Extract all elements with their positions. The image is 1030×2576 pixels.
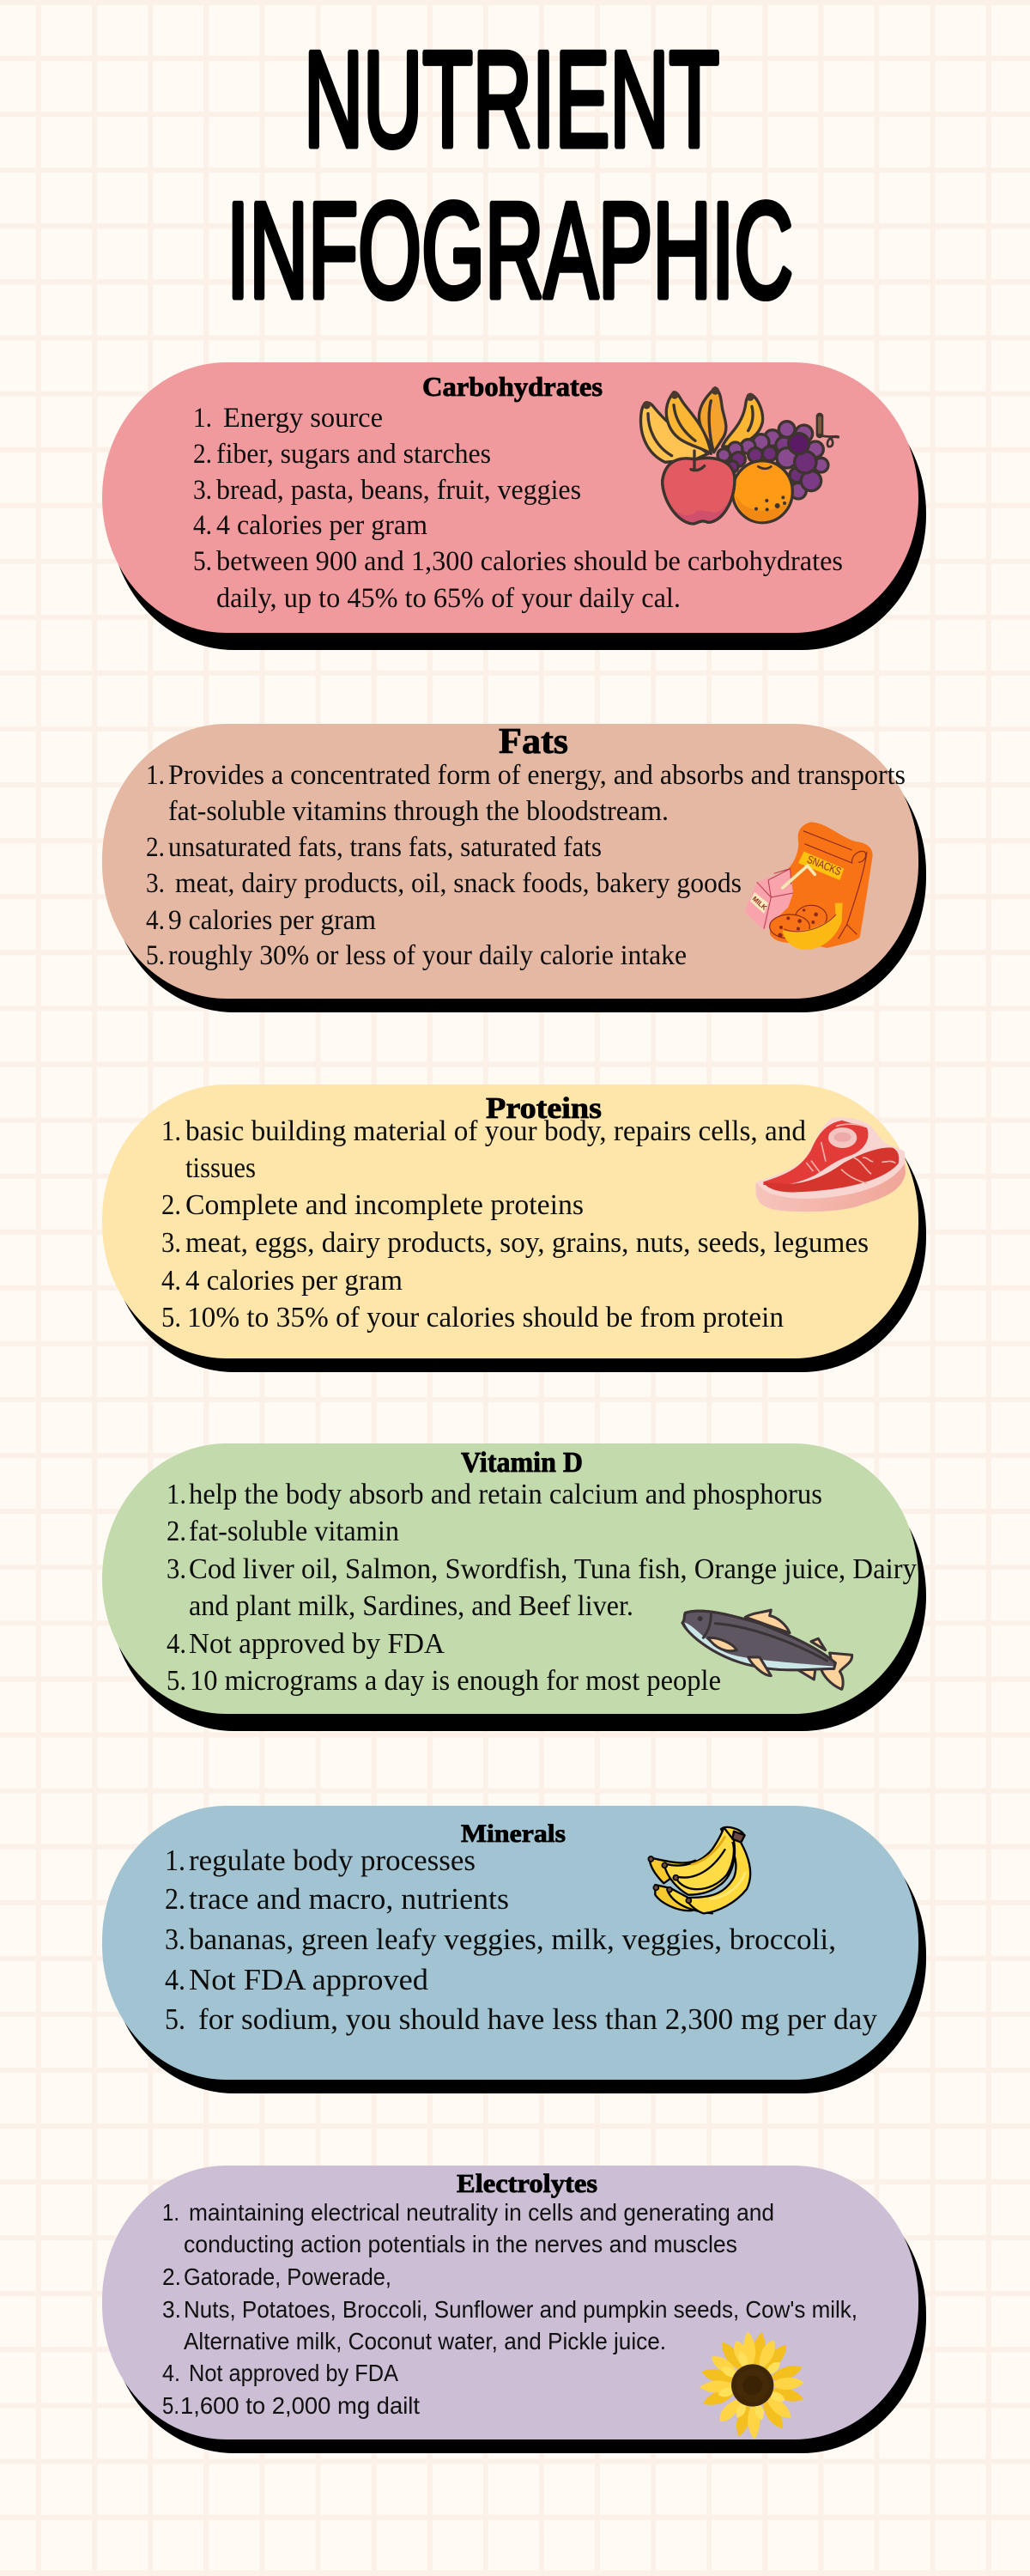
icon: snacks bag, milk and banana: MILK: [751, 895, 768, 912]
list: carbohydrates facts: 4.: [193, 510, 212, 541]
list: proteins facts: 2.: [161, 1189, 181, 1221]
list: carbohydrates facts: between 900 and 1,300 calories should be carbohydrates: [216, 546, 843, 577]
heading: electrolytes: Electrolytes: [457, 2168, 597, 2198]
icon: banana bunch: [648, 1827, 750, 1913]
list: electrolytes facts: Alternative milk, Coconut water, and Pickle juice.: [184, 2328, 666, 2354]
list: carbohydrates facts: 3.: [193, 475, 212, 506]
list: vitamin D facts: 4.: [167, 1628, 186, 1660]
list: fats facts: 3.: [146, 868, 165, 899]
list: vitamin D facts: Not approved by FDA: [189, 1628, 445, 1660]
list: electrolytes facts: [162, 2199, 857, 2419]
list: electrolytes facts: Not approved by FDA: [189, 2360, 398, 2386]
list: minerals facts: 2.: [165, 1882, 185, 1916]
list: vitamin D facts: 10 micrograms a day is enough for most people: [190, 1665, 721, 1697]
list: electrolytes facts: 4.: [162, 2360, 180, 2386]
list: electrolytes facts: Nuts, Potatoes, Broccoli, Sunflower and pumpkin seeds, Cow's milk,: [184, 2296, 857, 2323]
list: minerals facts: regulate body processes: [189, 1844, 476, 1877]
list: proteins facts: Complete and incomplete proteins: [185, 1189, 584, 1221]
list: vitamin D facts: 3.: [167, 1553, 186, 1585]
icon: snacks bag, milk and banana: SNACKS: [805, 854, 843, 878]
list: proteins facts: 3.: [161, 1227, 181, 1259]
panel: minerals: [102, 1806, 926, 2093]
list: electrolytes facts: conducting action potentials in the nerves and muscles: [184, 2231, 737, 2257]
list: carbohydrates facts: daily, up to 45% to 65% of your daily cal.: [216, 583, 681, 614]
list: proteins facts: 4 calories per gram: [185, 1265, 403, 1297]
list: minerals facts: 4.: [165, 1963, 185, 1996]
list: carbohydrates facts: 1.: [193, 403, 212, 434]
list: carbohydrates facts: Energy source: [223, 403, 383, 434]
list: electrolytes facts: Gatorade, Powerade,: [184, 2263, 391, 2290]
list: minerals facts: for sodium, you should have less than 2,300 mg per day: [198, 2002, 877, 2036]
list: minerals facts: 3.: [165, 1923, 185, 1956]
list: proteins facts: 1.: [161, 1115, 181, 1147]
icon: steak: [756, 1117, 906, 1212]
list: vitamin D facts: help the body absorb and retain calcium and phosphorus: [189, 1479, 822, 1510]
list: electrolytes facts: 1.: [162, 2199, 179, 2226]
list: carbohydrates facts: [193, 403, 843, 614]
list: vitamin D facts: 2.: [167, 1516, 186, 1547]
panel: carbohydrates: [102, 362, 926, 650]
list: proteins facts: 5.: [161, 1302, 181, 1334]
list: vitamin D facts: fat-soluble vitamin: [189, 1516, 399, 1547]
list: minerals facts: bananas, green leafy veggies, milk, veggies, broccoli,: [189, 1923, 836, 1956]
heading: proteins: Proteins: [486, 1091, 602, 1125]
heading: minerals: Minerals: [461, 1820, 566, 1848]
title: [227, 24, 793, 326]
list: fats facts: 5.: [146, 940, 165, 971]
list: fats facts: 2.: [146, 832, 165, 863]
list: vitamin D facts: [167, 1479, 917, 1697]
list: minerals facts: Not FDA approved: [189, 1963, 429, 1996]
list: minerals facts: trace and macro, nutrients: [189, 1882, 509, 1916]
list: fats facts: fat-soluble vitamins through the bloodstream.: [168, 796, 669, 827]
icon: fruit bundle: [641, 386, 839, 526]
list: proteins facts: meat, eggs, dairy products, soy, grains, nuts, seeds, legumes: [185, 1227, 869, 1259]
panel: vitamin D: [102, 1443, 926, 1731]
list: fats facts: Provides a concentrated form of energy, and absorbs and transports: [168, 760, 906, 791]
heading: carbohydrates: Carbohydrates: [422, 371, 603, 402]
list: electrolytes facts: 1,600 to 2,000 mg dailt: [180, 2392, 420, 2419]
list: minerals facts: [165, 1844, 877, 2036]
list: carbohydrates facts: 2.: [193, 439, 212, 470]
list: fats facts: 1.: [146, 760, 165, 791]
icon: sunflower: [700, 2330, 805, 2440]
list: fats facts: roughly 30% or less of your daily calorie intake: [168, 940, 687, 971]
list: vitamin D facts: 5.: [167, 1665, 186, 1697]
list: fats facts: 9 calories per gram: [168, 905, 376, 936]
list: carbohydrates facts: bread, pasta, beans, fruit, veggies: [216, 475, 581, 506]
list: fats facts: 4.: [146, 905, 165, 936]
list: proteins facts: 4.: [161, 1265, 181, 1297]
list: vitamin D facts: and plant milk, Sardines, and Beef liver.: [189, 1590, 633, 1622]
panel: fats: [102, 722, 926, 1012]
icon: snacks bag, milk and banana: [744, 822, 873, 950]
list: electrolytes facts: 2.: [162, 2263, 181, 2290]
list: carbohydrates facts: 4 calories per gram: [216, 510, 427, 541]
icon: fish: [682, 1610, 852, 1689]
list: fats facts: [146, 760, 906, 971]
list: electrolytes facts: 3.: [162, 2296, 181, 2323]
list: carbohydrates facts: fiber, sugars and starches: [216, 439, 491, 470]
heading: vitamin D: Vitamin D: [461, 1447, 583, 1479]
list: proteins facts: 10% to 35% of your calories should be from protein: [187, 1302, 784, 1334]
list: proteins facts: [161, 1115, 869, 1334]
title: NUTRIENT: [304, 24, 719, 175]
list: electrolytes facts: maintaining electrical neutrality in cells and generating and: [189, 2199, 774, 2226]
panel: proteins: [102, 1084, 926, 1372]
list: fats facts: unsaturated fats, trans fats, saturated fats: [168, 832, 602, 863]
list: proteins facts: tissues: [185, 1152, 256, 1184]
list: carbohydrates facts: 5.: [193, 546, 212, 577]
list: minerals facts: 1.: [165, 1844, 185, 1877]
panel: electrolytes: [102, 2166, 926, 2453]
list: fats facts: meat, dairy products, oil, snack foods, bakery goods: [175, 868, 742, 899]
list: electrolytes facts: 5.: [162, 2392, 179, 2419]
list: vitamin D facts: Cod liver oil, Salmon, Swordfish, Tuna fish, Orange juice, Dairy: [189, 1553, 917, 1585]
list: proteins facts: basic building material of your body, repairs cells, and: [185, 1115, 806, 1147]
heading: fats: Fats: [499, 722, 568, 762]
list: minerals facts: 5.: [165, 2002, 185, 2036]
list: vitamin D facts: 1.: [167, 1479, 186, 1510]
